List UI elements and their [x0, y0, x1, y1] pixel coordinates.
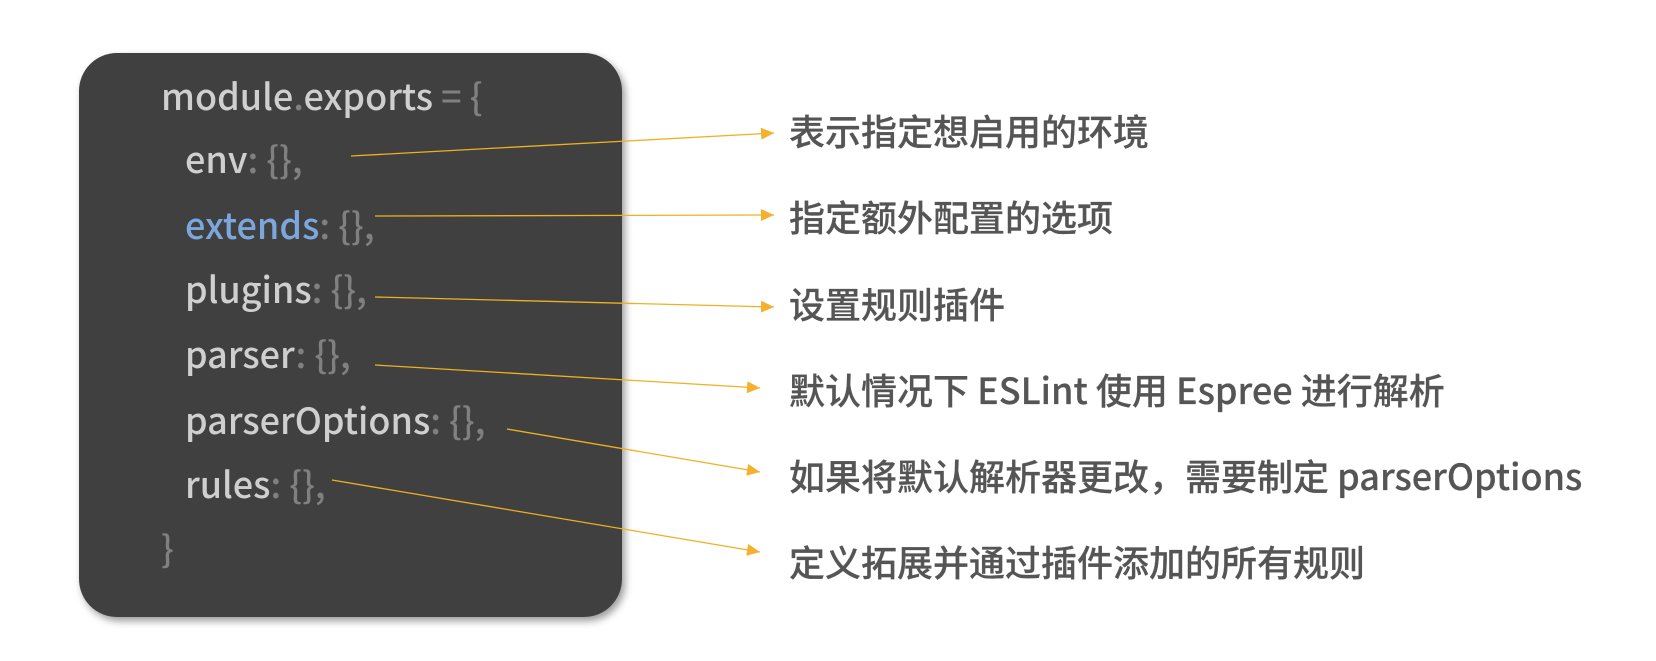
panel: code block: [79, 53, 622, 617]
code: parser: parser: {},: [185, 327, 351, 379]
code: env: env: {},: [185, 132, 303, 184]
code: parserOptions: parserOptions: {},: [185, 393, 485, 445]
label: env: 表示指定想启用的环境: [789, 104, 1149, 156]
label: parserOptions: 如果将默认解析器更改，需要制定 parserOptions: [789, 449, 1582, 501]
code: rules: rules: {},: [185, 457, 326, 509]
label: plugins: 设置规则插件: [789, 277, 1005, 329]
code: extends: extends: {},: [185, 198, 375, 250]
code: module.exports: module.exports = {: [161, 69, 483, 121]
label: extends: 指定额外配置的选项: [789, 190, 1113, 242]
label: rules: 定义拓展并通过插件添加的所有规则: [789, 535, 1365, 587]
code: closing brace: }: [161, 521, 174, 573]
label: parser: 默认情况下 ESLint 使用 Espree 进行解析: [789, 363, 1445, 415]
code: plugins: plugins: {},: [185, 262, 367, 314]
